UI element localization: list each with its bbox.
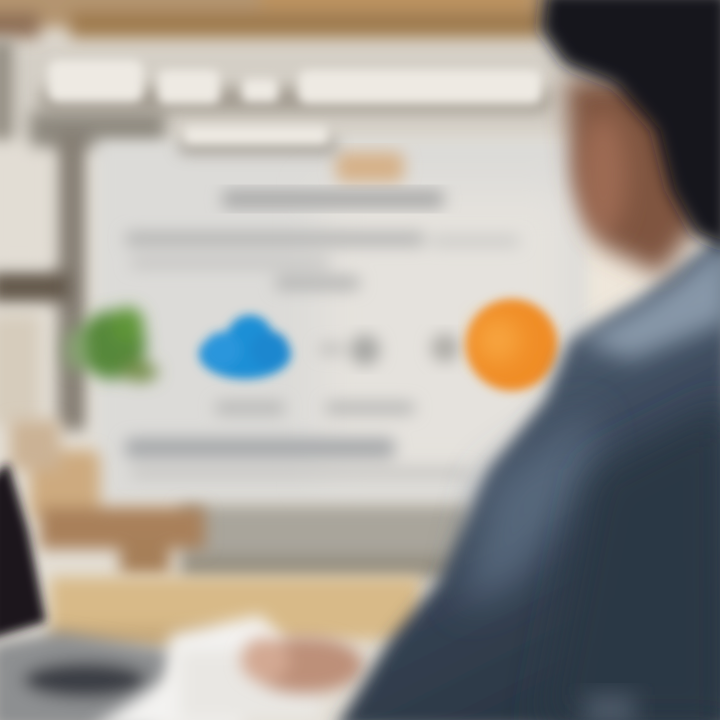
blurred title text bbox=[40, 60, 550, 154]
comparison symbols bbox=[320, 334, 459, 365]
presentation board bbox=[96, 140, 586, 502]
wooden shelf bbox=[0, 0, 550, 38]
person: neck and face bbox=[565, 80, 700, 275]
hand bbox=[241, 637, 363, 693]
white papers bbox=[90, 615, 320, 720]
board heading line bbox=[222, 190, 444, 208]
wooden table bbox=[50, 577, 420, 650]
dark object at left bbox=[0, 462, 46, 640]
lower wall band bbox=[180, 505, 470, 580]
lower text lines bbox=[125, 402, 470, 478]
board text lines bbox=[125, 232, 520, 290]
icon: orange circle bbox=[466, 299, 558, 391]
person: shirt bbox=[335, 230, 720, 720]
board heading badge bbox=[336, 152, 404, 182]
laptop bbox=[0, 632, 180, 720]
wooden stand bbox=[10, 420, 205, 575]
green plant bbox=[63, 307, 158, 382]
icon: blue cloud bbox=[199, 315, 291, 379]
person: hair bbox=[540, 0, 720, 250]
left shelving frame bbox=[0, 40, 165, 430]
